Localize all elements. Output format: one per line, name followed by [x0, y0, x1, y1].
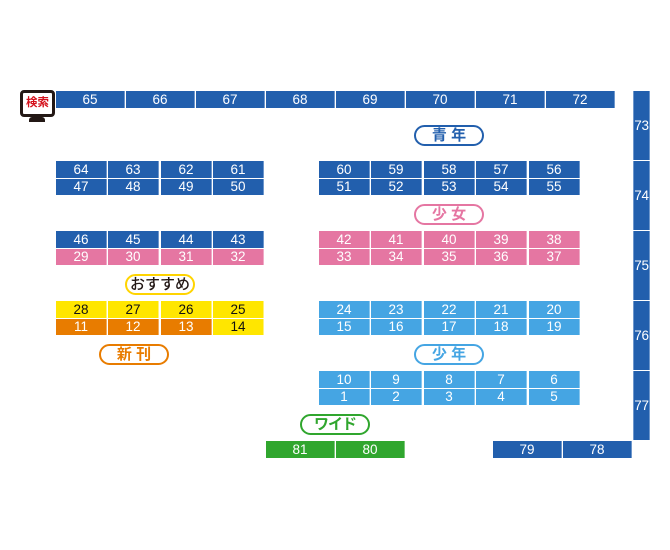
- shelf 6: [529, 371, 580, 388]
- shelf 23: [371, 301, 422, 318]
- left block shelves 47-64: [56, 161, 264, 195]
- shelf 78: [563, 441, 632, 458]
- shelf 76: 76: [634, 328, 649, 343]
- shelf 7: [476, 371, 527, 388]
- shelf 67: [196, 91, 265, 108]
- shelf 22: [424, 301, 475, 318]
- shelf 73: [633, 91, 650, 160]
- left block shelves 29-46: [56, 231, 264, 265]
- shelf 51: 51: [336, 179, 352, 194]
- shelf 59: [371, 161, 422, 178]
- shelf 52: [371, 179, 422, 195]
- monitor screen: [20, 90, 55, 117]
- shelf 15: [319, 319, 370, 335]
- shelf 12: [108, 319, 159, 335]
- label: wide: ワイド: [314, 416, 356, 433]
- right block shelves 33-42: [319, 231, 580, 265]
- shelf 16: [371, 319, 422, 335]
- shelf 54: 54: [493, 179, 509, 194]
- shelf 5: 5: [550, 389, 558, 404]
- shelf 74: [633, 161, 650, 230]
- shelf 75: 75: [634, 258, 649, 273]
- shelf 21: 21: [493, 302, 509, 317]
- shelf 71: [476, 91, 545, 108]
- monitor stand: [29, 117, 45, 122]
- shelf 46: 46: [73, 232, 89, 247]
- shelf 45: 45: [125, 232, 141, 247]
- shelf 10: 10: [336, 372, 352, 387]
- label: seinen: 青 年: [432, 127, 466, 144]
- left block shelves 11-28: [56, 301, 264, 335]
- right block shelves 51-60: [319, 161, 580, 195]
- shelf 59: 59: [388, 162, 404, 177]
- shelf 13: 13: [178, 319, 194, 334]
- shelf 17: [424, 319, 475, 335]
- shelf 35: 35: [441, 249, 457, 264]
- shelf 62: [161, 161, 212, 178]
- shelf 33: 33: [336, 249, 352, 264]
- shelf 34: 34: [388, 249, 404, 264]
- shelf 50: 50: [230, 179, 246, 194]
- shelf 44: [161, 231, 212, 248]
- shelf 55: 55: [546, 179, 562, 194]
- shelf 73: 73: [634, 118, 649, 133]
- shelf 13: [161, 319, 212, 335]
- shelf 61: [213, 161, 264, 178]
- shelf 77: [633, 371, 650, 440]
- shelf 54: [476, 179, 527, 195]
- shelf 51: [319, 179, 370, 195]
- shelf 57: [476, 161, 527, 178]
- shelf 31: [161, 249, 212, 265]
- shelf 48: 48: [125, 179, 141, 194]
- shelf 35: [424, 249, 475, 265]
- shelf 24: 24: [336, 302, 352, 317]
- shelf 74: 74: [634, 188, 649, 203]
- shelf 63: 63: [125, 162, 141, 177]
- shelf 66: 66: [152, 92, 168, 107]
- label: shounen: [414, 344, 484, 365]
- shelf 24: [319, 301, 370, 318]
- shelf 32: [213, 249, 264, 265]
- shelf 47: [56, 179, 107, 195]
- shelf 28: [56, 301, 107, 318]
- shelf 78: 78: [589, 442, 605, 457]
- label: shoujo: 少 女: [432, 206, 466, 223]
- bottom shelves 79-78: [493, 441, 632, 458]
- shelf 42: 42: [336, 232, 352, 247]
- shelf 26: 26: [178, 302, 194, 317]
- shelf 43: 43: [230, 232, 246, 247]
- wide shelves 81-80: [266, 441, 405, 458]
- shelf 57: 57: [493, 162, 509, 177]
- shelf 49: [161, 179, 212, 195]
- shelf 9: [371, 371, 422, 388]
- shelf 45: [108, 231, 159, 248]
- label: osusume: おすすめ: [130, 276, 190, 293]
- shelf 12: 12: [125, 319, 141, 334]
- shelf 61: 61: [230, 162, 246, 177]
- shelf 8: 8: [445, 372, 453, 387]
- shelf 69: 69: [362, 92, 378, 107]
- shelf 3: [424, 389, 475, 405]
- shelf 3: 3: [445, 389, 453, 404]
- shelf 4: 4: [497, 389, 505, 404]
- shelf 8: [424, 371, 475, 388]
- label: shoujo: [414, 204, 484, 225]
- shelf 36: [476, 249, 527, 265]
- shelf 80: 80: [362, 442, 378, 457]
- shelf 41: [371, 231, 422, 248]
- right column shelves 73-77: [633, 91, 650, 440]
- shelf 38: 38: [546, 232, 562, 247]
- shelf 34: [371, 249, 422, 265]
- shelf 33: [319, 249, 370, 265]
- shelf 43: [213, 231, 264, 248]
- top row shelves 65-72: [56, 91, 615, 108]
- right block shelves 1-10: [319, 371, 580, 405]
- shelf 80: [336, 441, 405, 458]
- label: shounen: 少 年: [432, 346, 466, 363]
- shelf 40: 40: [441, 232, 457, 247]
- shelf 11: 11: [74, 319, 88, 334]
- shelf 15: 15: [336, 319, 352, 334]
- shelf 65: 65: [82, 92, 98, 107]
- shelf 55: [529, 179, 580, 195]
- shelf 18: [476, 319, 527, 335]
- shelf 48: [108, 179, 159, 195]
- shelf 20: [529, 301, 580, 318]
- right block shelves 15-24: [319, 301, 580, 335]
- label: osusume: [125, 274, 195, 295]
- shelf 22: 22: [441, 302, 457, 317]
- shelf 44: 44: [178, 232, 194, 247]
- shelf 7: 7: [497, 372, 505, 387]
- shelf 2: 2: [392, 389, 400, 404]
- shelf 52: 52: [388, 179, 404, 194]
- shelf 29: [56, 249, 107, 265]
- shelf 37: [529, 249, 580, 265]
- shelf 69: [336, 91, 405, 108]
- shelf 76: [633, 301, 650, 370]
- icon: search terminal: [20, 90, 55, 122]
- shelf 9: 9: [392, 372, 400, 387]
- shelf 25: [213, 301, 264, 318]
- shelf 58: 58: [441, 162, 457, 177]
- label: wide: [300, 414, 370, 435]
- shelf 56: 56: [546, 162, 562, 177]
- shelf 53: 53: [441, 179, 457, 194]
- shelf 38: [529, 231, 580, 248]
- shelf 5: [529, 389, 580, 405]
- shelf 26: [161, 301, 212, 318]
- shelf 1: [319, 389, 370, 405]
- shelf 56: [529, 161, 580, 178]
- shelf 72: 72: [572, 92, 588, 107]
- shelf 28: 28: [73, 302, 89, 317]
- shelf 65: [56, 91, 125, 108]
- shelf 68: 68: [292, 92, 308, 107]
- shelf 10: [319, 371, 370, 388]
- shelf 14: [213, 319, 264, 335]
- shelf 42: [319, 231, 370, 248]
- shelf 77: 77: [634, 398, 649, 413]
- shelf 81: 81: [292, 442, 308, 457]
- shelf 60: 60: [336, 162, 352, 177]
- monitor screen: 検索: [26, 97, 49, 109]
- shelf 27: [108, 301, 159, 318]
- shelf 14: 14: [230, 319, 246, 334]
- shelf 19: 19: [546, 319, 562, 334]
- shelf 19: [529, 319, 580, 335]
- shelf 2: [371, 389, 422, 405]
- shelf 27: 27: [125, 302, 141, 317]
- shelf 58: [424, 161, 475, 178]
- shelf 36: 36: [493, 249, 509, 264]
- shelf 31: 31: [178, 249, 194, 264]
- shelf 47: 47: [73, 179, 89, 194]
- shelf 11: [56, 319, 107, 335]
- shelf 16: 16: [388, 319, 404, 334]
- shelf 21: [476, 301, 527, 318]
- shelf 32: 32: [230, 249, 246, 264]
- shelf 1: 1: [340, 389, 348, 404]
- shelf 4: [476, 389, 527, 405]
- shelf 63: [108, 161, 159, 178]
- label: shinkan: [99, 344, 169, 365]
- shelf 66: [126, 91, 195, 108]
- label: seinen: [414, 125, 484, 146]
- shelf 30: [108, 249, 159, 265]
- shelf 23: 23: [388, 302, 404, 317]
- shelf 37: 37: [546, 249, 562, 264]
- shelf 25: 25: [230, 302, 246, 317]
- shelf 41: 41: [388, 232, 404, 247]
- shelf 81: [266, 441, 335, 458]
- shelf 39: 39: [493, 232, 509, 247]
- shelf 79: 79: [519, 442, 535, 457]
- shelf 67: 67: [222, 92, 238, 107]
- shelf 17: 17: [441, 319, 457, 334]
- shelf 39: [476, 231, 527, 248]
- shelf 64: [56, 161, 107, 178]
- shelf 68: [266, 91, 335, 108]
- shelf 79: [493, 441, 562, 458]
- shelf 60: [319, 161, 370, 178]
- shelf 70: 70: [432, 92, 448, 107]
- shelf 64: 64: [73, 162, 89, 177]
- shelf 53: [424, 179, 475, 195]
- shelf 49: 49: [178, 179, 194, 194]
- shelf 20: 20: [546, 302, 562, 317]
- shelf 50: [213, 179, 264, 195]
- shelf 75: [633, 231, 650, 300]
- shelf 70: [406, 91, 475, 108]
- shelf 29: 29: [73, 249, 89, 264]
- shelf 62: 62: [178, 162, 194, 177]
- shelf 40: [424, 231, 475, 248]
- shelf 18: 18: [493, 319, 509, 334]
- shelf 72: [546, 91, 615, 108]
- shelf 71: 71: [502, 92, 518, 107]
- label: shinkan: 新 刊: [117, 346, 151, 363]
- shelf 46: [56, 231, 107, 248]
- shelf 6: 6: [550, 372, 558, 387]
- shelf 30: 30: [125, 249, 141, 264]
